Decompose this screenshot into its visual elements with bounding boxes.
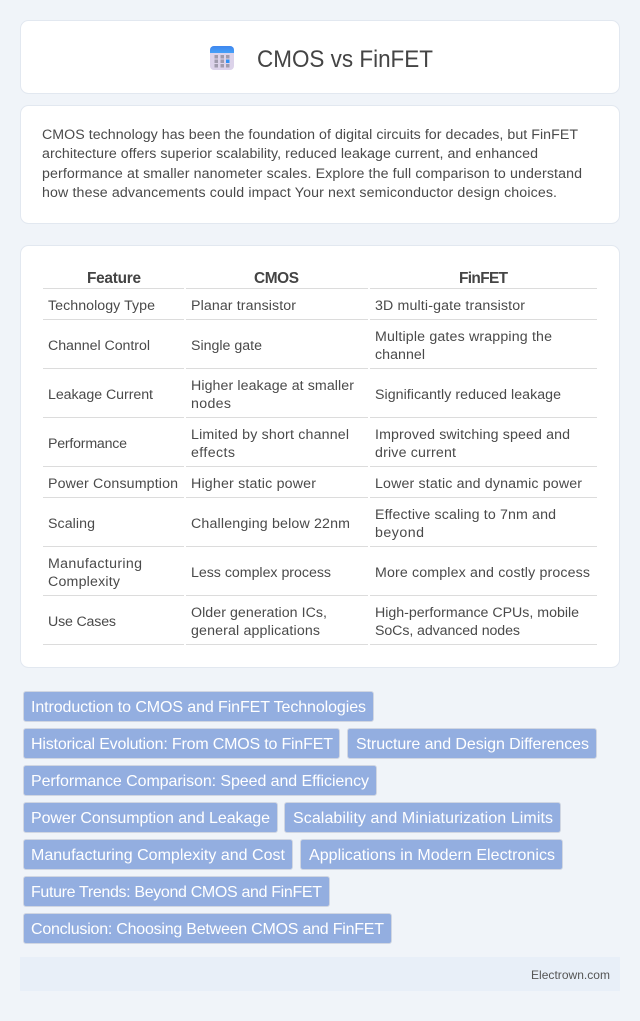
intro text: performance at smaller nanometer scales. Explore the full comparison to understand [42, 166, 582, 182]
chip: future trends [24, 876, 330, 906]
chip: performance comparison: Performance Comparison: Speed and Efficiency [31, 773, 369, 790]
row: performance: Limited by short channel [191, 427, 349, 443]
chip: power consumption: Power Consumption and Leakage [31, 810, 270, 827]
table rules [43, 288, 597, 644]
panel: introduction [20, 106, 620, 224]
row: technology type: 3D multi-gate transistor [375, 298, 525, 314]
chip: introduction [24, 692, 374, 722]
row: use cases [48, 605, 579, 639]
table header: FinFET [459, 270, 509, 287]
chip: manufacturing: Manufacturing Complexity and Cost [31, 847, 286, 864]
table header [87, 270, 509, 287]
chip: performance comparison [24, 766, 376, 796]
header panel [20, 20, 620, 94]
title: CMOS vs FinFET [257, 46, 433, 73]
row: manufacturing complexity [48, 556, 590, 590]
chip: applications [300, 840, 562, 870]
row: leakage current: nodes [191, 396, 231, 412]
footer [20, 957, 620, 991]
row: leakage current: Higher leakage at smaller [191, 378, 354, 394]
row: power consumption: Higher static power [191, 476, 316, 492]
chip: manufacturing [24, 840, 292, 870]
table header: Feature [87, 270, 141, 287]
row: scaling: Scaling [48, 516, 95, 532]
row: manufacturing complexity: Complexity [48, 574, 121, 590]
row: technology type: Planar transistor [191, 298, 296, 314]
row: scaling: beyond [375, 525, 424, 541]
row: scaling: Challenging below 22nm [191, 516, 350, 532]
footer: Electrown.com [531, 968, 610, 982]
row: leakage current: Leakage Current [48, 387, 153, 403]
row: channel control [48, 329, 552, 363]
row: use cases: general applications [191, 623, 320, 639]
row: power consumption: Power Consumption [48, 476, 178, 492]
row: scaling: Effective scaling to 7nm and [375, 507, 556, 523]
row: scaling [48, 507, 556, 541]
chip: scalability: Scalability and Miniaturization Limits [293, 810, 553, 827]
row: manufacturing complexity: More complex and costly process [375, 565, 590, 581]
row: performance: effects [191, 445, 235, 461]
row: manufacturing complexity: Manufacturing [48, 556, 142, 572]
topic chips [24, 692, 596, 944]
chip: historical evolution [24, 728, 340, 758]
row: performance [48, 427, 570, 461]
row: power consumption: Lower static and dynamic power [375, 476, 582, 492]
row: leakage current: Significantly reduced leakage [375, 387, 561, 403]
chip: applications: Applications in Modern Electronics [309, 847, 555, 864]
chip: historical evolution: Historical Evolution: From CMOS to FinFET [31, 736, 333, 753]
row: channel control: Multiple gates wrapping the [375, 329, 552, 345]
row: channel control: Single gate [191, 338, 262, 354]
chip: introduction: Introduction to CMOS and FinFET Technologies [31, 699, 366, 716]
row: performance: Performance [48, 436, 127, 452]
panel: comparison table [20, 246, 620, 668]
chip: conclusion [24, 914, 392, 944]
row: use cases: Older generation ICs, [191, 605, 327, 621]
intro text [42, 127, 582, 201]
row: technology type: Technology Type [48, 298, 155, 314]
intro text: architecture offers superior scalability, reduced leakage current, and enhanced [42, 146, 538, 162]
table header: CMOS [254, 270, 299, 287]
chip: scalability [284, 802, 560, 832]
row: leakage current [48, 378, 561, 412]
row: power consumption [48, 476, 582, 492]
chip: structure and design [348, 728, 596, 758]
row: manufacturing complexity: Less complex process [191, 565, 331, 581]
row: use cases: High-performance CPUs, mobile [375, 605, 579, 621]
row: technology type [48, 298, 525, 314]
icon: calendar [210, 46, 234, 70]
chip: conclusion: Conclusion: Choosing Between CMOS and FinFET [31, 921, 384, 938]
intro text: CMOS technology has been the foundation of digital circuits for decades, but FinFET [42, 127, 578, 143]
row: use cases: Use Cases [48, 614, 116, 630]
chip: structure and design: Structure and Design Differences [356, 736, 589, 753]
chip: future trends: Future Trends: Beyond CMOS and FinFET [31, 884, 322, 901]
chip: power consumption [24, 802, 278, 832]
row: channel control: channel [375, 347, 425, 363]
row: performance: drive current [375, 445, 456, 461]
intro text: how these advancements could impact Your next semiconductor design choices. [42, 185, 557, 201]
row: performance: Improved switching speed and [375, 427, 570, 443]
row: use cases: SoCs, advanced nodes [375, 623, 520, 639]
row: channel control: Channel Control [48, 338, 150, 354]
